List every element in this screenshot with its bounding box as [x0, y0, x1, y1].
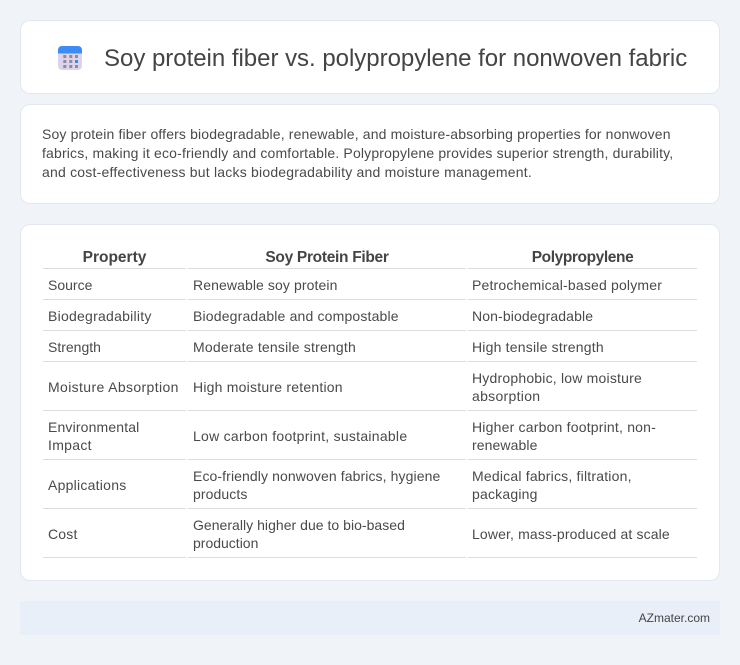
row: cost: Cost: [48, 526, 78, 542]
row: moisture absorption: [43, 370, 697, 411]
header row: Polypropylene: [532, 249, 633, 266]
header row: [43, 249, 697, 269]
row: applications: packaging: [472, 486, 538, 502]
row: applications: Medical fabrics, filtration,: [472, 468, 632, 484]
row: biodegradability: Biodegradability: [48, 308, 152, 324]
row: moisture absorption: absorption: [472, 388, 540, 404]
row: environmental impact: Environmental: [48, 418, 139, 434]
row: environmental impact: Low carbon footprint, sustainable: [193, 428, 407, 444]
row: biodegradability: [43, 308, 697, 331]
row: moisture absorption: Hydrophobic, low moisture: [472, 370, 642, 386]
row: applications: Eco-friendly nonwoven fabrics, hygiene: [193, 468, 440, 484]
row: moisture absorption: Moisture Absorption: [48, 378, 179, 394]
title card: [20, 20, 720, 94]
row: source: Renewable soy protein: [193, 276, 338, 292]
row: cost: production: [193, 534, 258, 550]
row: cost: Generally higher due to bio-based: [193, 516, 405, 532]
row: environmental impact: Impact: [48, 436, 92, 452]
row: strength: High tensile strength: [472, 338, 604, 354]
row: strength: [43, 338, 697, 362]
row: cost: Lower, mass-produced at scale: [472, 526, 670, 542]
row: biodegradability: Biodegradable and compostable: [193, 308, 399, 324]
row: source: Petrochemical-based polymer: [472, 276, 662, 292]
row: applications: products: [193, 486, 248, 502]
row: strength: Moderate tensile strength: [193, 338, 356, 354]
row: moisture absorption: High moisture retention: [193, 378, 343, 394]
footer credit: AZmater.com: [639, 611, 710, 625]
row: source: [43, 276, 697, 300]
summary text: and cost-effectiveness but lacks biodegradability and moisture management.: [42, 164, 532, 180]
footer bar: [20, 601, 720, 635]
header row: Property: [83, 249, 146, 266]
title: Soy protein fiber vs. polypropylene for nonwoven fabric: [104, 45, 687, 72]
comparison table card: [20, 224, 720, 581]
row: environmental impact: renewable: [472, 436, 538, 452]
header row: Soy Protein Fiber: [265, 249, 389, 266]
row: strength: Strength: [48, 338, 101, 354]
icon: calendar: [58, 46, 82, 70]
summary card: [20, 104, 720, 204]
row: environmental impact: [43, 418, 697, 460]
row: applications: [43, 468, 697, 509]
row: biodegradability: Non-biodegradable: [472, 308, 593, 324]
summary text: Soy protein fiber offers biodegradable, renewable, and moisture-absorbing properties for nonwoven: [42, 126, 671, 142]
row: source: Source: [48, 276, 92, 292]
row: cost: [43, 516, 697, 558]
summary text: fabrics, making it eco-friendly and comfortable. Polypropylene provides superior strength, durability,: [42, 145, 673, 161]
row: applications: Applications: [48, 476, 126, 492]
comparison table: [43, 249, 697, 558]
summary text: [42, 126, 673, 180]
row: environmental impact: Higher carbon footprint, non-: [472, 418, 656, 434]
